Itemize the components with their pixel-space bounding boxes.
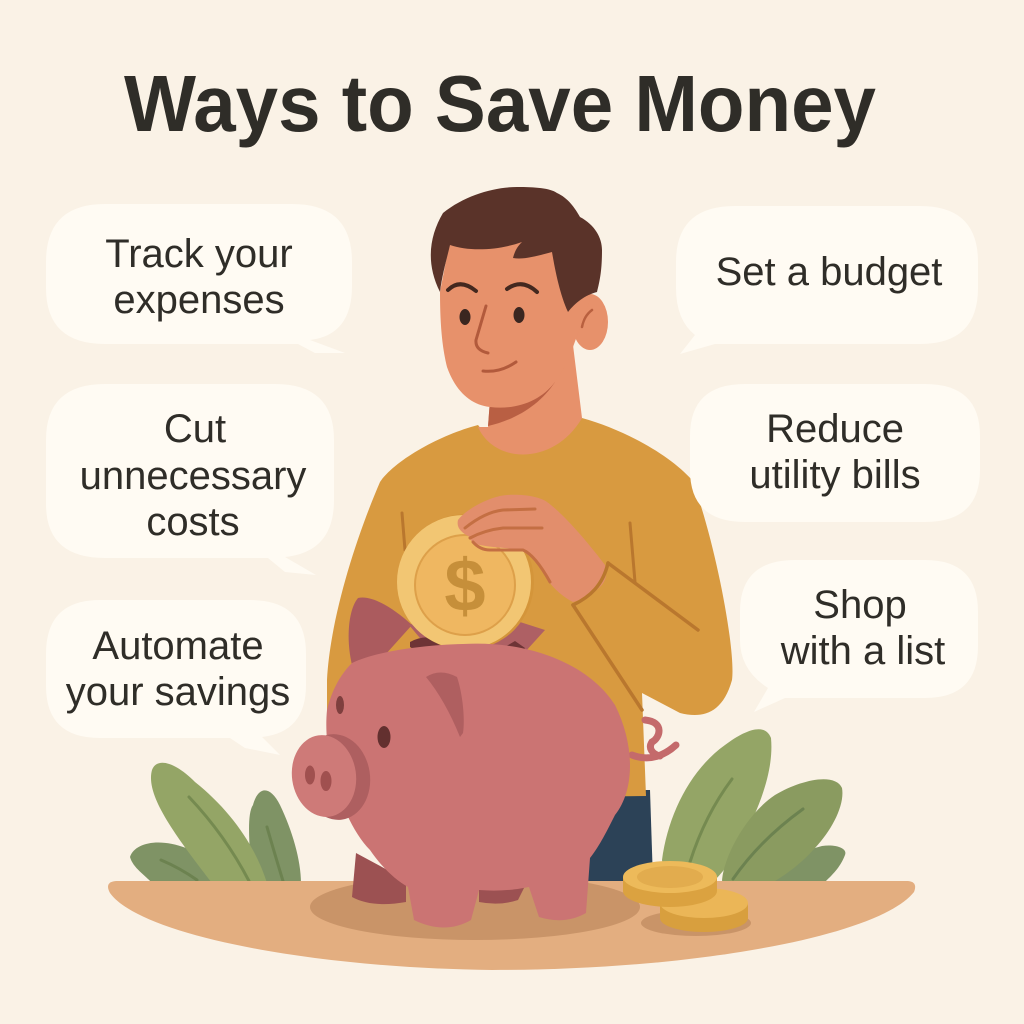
back ear: [349, 597, 412, 665]
eyes: [460, 307, 524, 325]
icon: left plant: [130, 763, 301, 883]
callout: shop with a list: [740, 560, 978, 712]
ear: [572, 294, 608, 350]
face: [440, 235, 590, 408]
callout: reduce utility bills: utility bills: [749, 453, 921, 497]
callout: set a budget: Set a budget: [716, 250, 942, 294]
sleeve: [573, 563, 698, 710]
hand: [458, 495, 608, 605]
callout: automate your savings: [46, 600, 306, 755]
pig body: [326, 644, 630, 928]
callout: automate your savings: your savings: [66, 670, 290, 714]
ground: [108, 881, 915, 970]
nose and mouth: [476, 306, 516, 371]
callout: track your expenses: expenses: [113, 278, 285, 322]
callout: track your expenses: Track your: [105, 232, 293, 276]
ear on head: [426, 672, 464, 737]
piggy bank: [287, 514, 630, 928]
callout: shop with a list: Shop: [813, 583, 907, 627]
callout: reduce utility bills: [690, 384, 980, 522]
callout: cut unnecessary costs: unnecessary: [80, 454, 306, 498]
person: [327, 187, 732, 881]
trousers: [585, 790, 653, 881]
slit: [410, 637, 525, 653]
eyebrows: [448, 284, 537, 292]
callout: track your expenses: [46, 204, 352, 353]
forehead mark: [336, 696, 344, 714]
title: Ways to Save Money: [124, 59, 876, 148]
back legs: [352, 853, 528, 904]
eye: [378, 726, 390, 748]
callout: cut unnecessary costs: [46, 384, 334, 575]
sweater: [327, 418, 732, 800]
neck: [478, 345, 582, 454]
coin: $: [444, 544, 486, 627]
snout: [287, 730, 376, 824]
chin shadow: [488, 382, 555, 426]
callout: cut unnecessary costs: costs: [146, 500, 240, 544]
callout: cut unnecessary costs: Cut: [164, 407, 226, 451]
callout: reduce utility bills: Reduce: [766, 407, 904, 451]
sweater fold lines: [402, 513, 635, 582]
callout: set a budget: [676, 206, 978, 354]
icon: tail: [632, 720, 676, 758]
slot: [409, 618, 545, 652]
hair: [431, 187, 602, 312]
icon: right plant: [662, 729, 845, 883]
ground shadow: [310, 874, 751, 940]
coin: [397, 514, 534, 650]
coin stack: [623, 861, 748, 932]
callout: automate your savings: Automate: [92, 624, 264, 668]
callout: shop with a list: with a list: [780, 629, 945, 673]
